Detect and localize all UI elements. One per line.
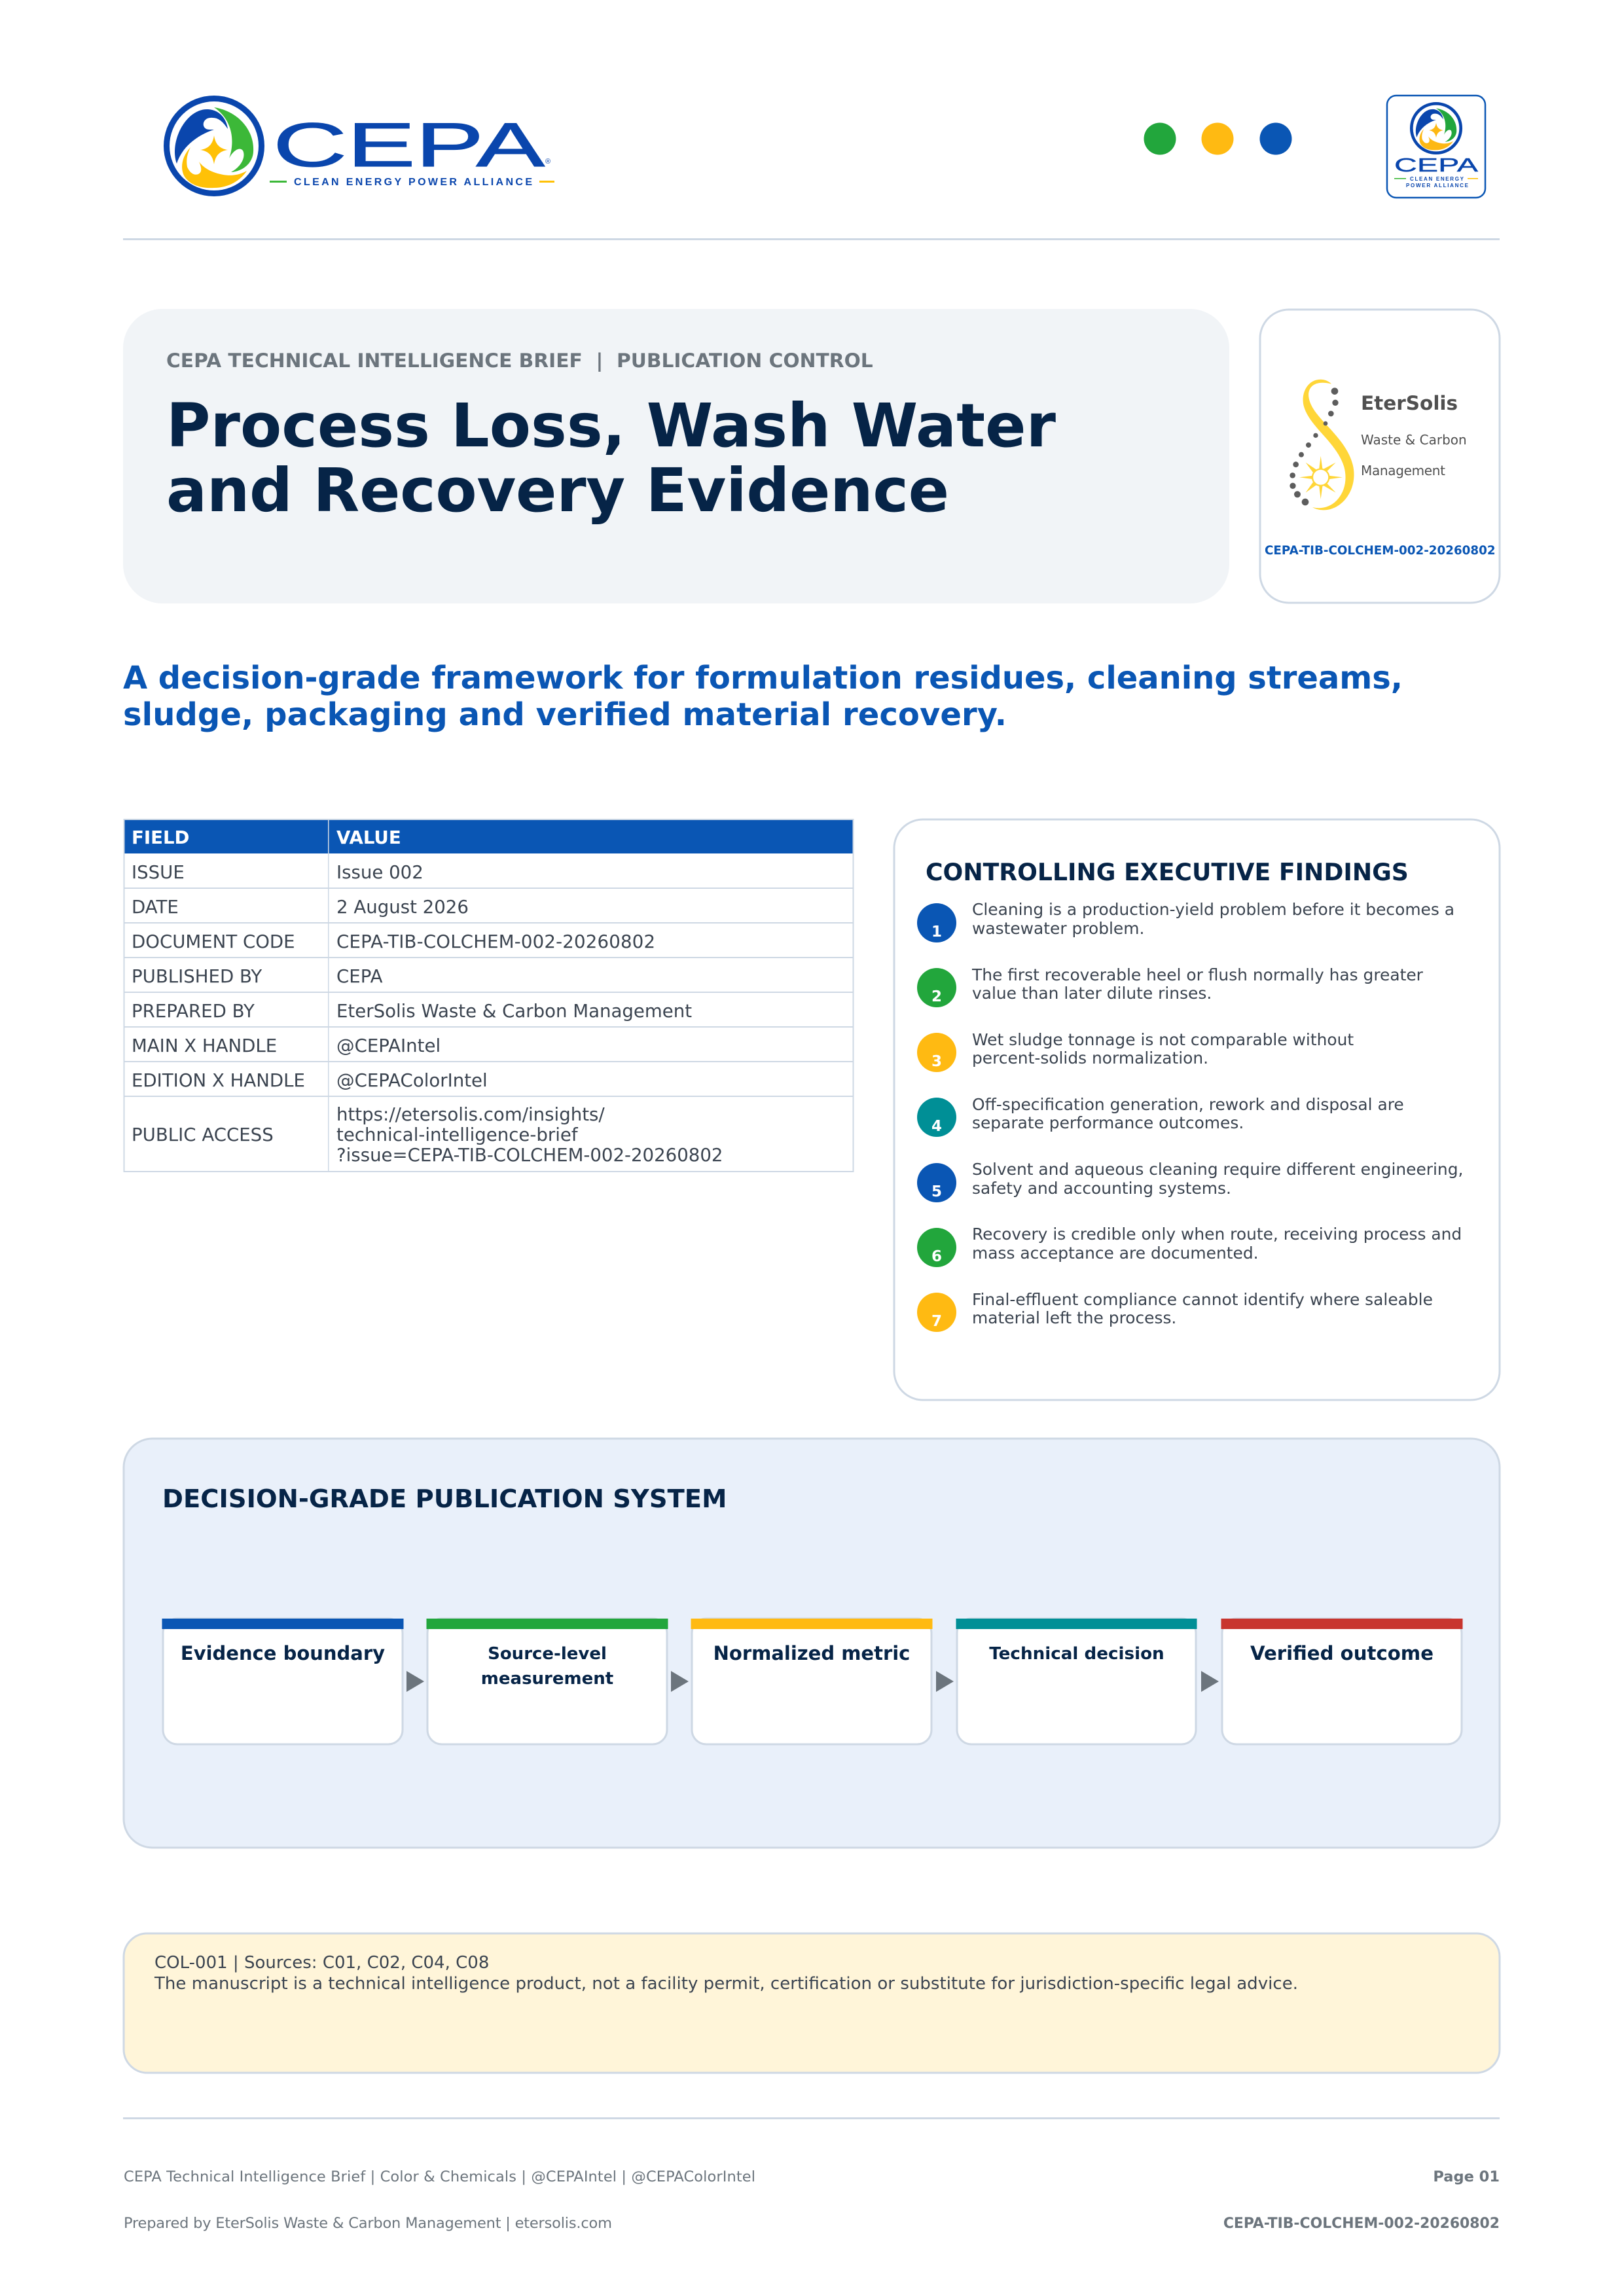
finding 3: Wet sludge tonnage is not comparable without — [972, 1030, 1354, 1049]
findings heading: CONTROLLING EXECUTIVE FINDINGS — [926, 858, 1409, 886]
table rows — [124, 819, 854, 1172]
table rows: @CEPAColorIntel — [336, 1069, 488, 1091]
table rows: CEPA — [336, 965, 383, 987]
table rows: PUBLISHED BY — [132, 965, 262, 987]
panel: hero title — [123, 309, 1229, 603]
subtitle: sludge, packaging and verified material recovery. — [123, 696, 1007, 733]
EterSolis descriptor: Waste & Carbon — [1361, 432, 1467, 448]
status dots — [1144, 123, 1292, 154]
EterSolis descriptor — [1361, 432, 1467, 478]
logo tagline: CLEAN ENERGY POWER ALLIANCE — [294, 177, 532, 188]
header rule — [123, 238, 1500, 240]
finding 5: Solvent and aqueous cleaning require different engineering, — [972, 1160, 1463, 1179]
finding 5: 5 — [931, 1183, 942, 1200]
finding 3: 3 — [931, 1053, 942, 1070]
finding 5: safety and accounting systems. — [972, 1179, 1231, 1198]
finding 4: Off-specification generation, rework and disposal are — [972, 1095, 1404, 1114]
table rows: technical-intelligence-brief — [336, 1124, 579, 1145]
document code: CEPA-TIB-COLCHEM-002-20260802 — [1265, 544, 1496, 558]
arrow 3 — [936, 1671, 954, 1692]
finding 1: 1 — [931, 924, 942, 941]
icon: CEPA badge emblem — [1411, 103, 1461, 153]
icon: EterSolis emblem — [1290, 380, 1354, 510]
table rows: ?issue=CEPA-TIB-COLCHEM-002-20260802 — [336, 1144, 723, 1166]
badge tagline: CLEAN ENERGY — [1410, 176, 1464, 182]
EterSolis name: EterSolis — [1361, 392, 1458, 414]
step: technical decision: Technical decision — [989, 1644, 1164, 1664]
table: publication control — [124, 819, 854, 1172]
step: evidence boundary: Evidence boundary — [181, 1642, 385, 1664]
step: verified outcome: Verified outcome — [1250, 1642, 1434, 1664]
finding 2: value than later dilute rinses. — [972, 984, 1212, 1003]
callout: source note: The manuscript is a technical intelligence product, not a facility permit, certification or substitute for jurisdiction-specific legal advice. — [154, 1974, 1298, 1994]
table rows: EDITION X HANDLE — [132, 1069, 305, 1091]
table rows: DOCUMENT CODE — [132, 931, 295, 952]
finding 2: The first recoverable heel or flush normally has greater — [971, 965, 1424, 984]
logo registered mark: ® — [545, 158, 550, 166]
table header: FIELD — [132, 827, 189, 848]
finding 1: Cleaning is a production-yield problem before it becomes a — [972, 900, 1454, 919]
title — [166, 391, 1056, 526]
logo wordmark: CEPA — [273, 111, 545, 180]
panel: EterSolis logo card — [1260, 310, 1500, 603]
icon: CEPA emblem — [166, 98, 262, 194]
logo: CEPA primary — [166, 98, 554, 194]
footer: Prepared by EterSolis Waste & Carbon Management | etersolis.com — [124, 2215, 612, 2232]
panel: controlling executive findings — [894, 819, 1500, 1400]
logo: CEPA badge — [1387, 96, 1485, 198]
step: source-level measurement: measurement — [481, 1669, 613, 1689]
table rows: Issue 002 — [336, 861, 424, 883]
table rows: PREPARED BY — [132, 1000, 255, 1022]
footer rule — [123, 2117, 1500, 2119]
finding 1: wastewater problem. — [972, 919, 1144, 938]
table header — [124, 819, 854, 853]
finding 7 — [917, 1290, 1433, 1332]
table rows: PUBLIC ACCESS — [132, 1124, 274, 1145]
finding 6: mass acceptance are documented. — [972, 1244, 1259, 1263]
badge tagline: POWER ALLIANCE — [1406, 183, 1469, 188]
subtitle: A decision-grade framework for formulation residues, cleaning streams, — [123, 660, 1403, 696]
table header: VALUE — [336, 827, 401, 848]
table rows: MAIN X HANDLE — [132, 1035, 277, 1056]
table rows: CEPA-TIB-COLCHEM-002-20260802 — [336, 931, 655, 952]
finding 7: 7 — [931, 1313, 942, 1330]
step: normalized metric: Normalized metric — [713, 1642, 910, 1664]
badge wordmark: CEPA — [1394, 155, 1479, 176]
table rows: @CEPAIntel — [336, 1035, 441, 1056]
callout: source note — [124, 1933, 1500, 2073]
title: Process Loss, Wash Water — [166, 391, 1056, 461]
finding 2 — [917, 965, 1424, 1007]
eyebrow: CEPA TECHNICAL INTELLIGENCE BRIEF | PUBLICATION CONTROL — [166, 350, 873, 372]
finding 1 — [917, 900, 1454, 942]
finding 3 — [917, 1030, 1354, 1072]
subtitle — [123, 660, 1403, 733]
finding 7: material left the process. — [972, 1308, 1176, 1327]
EterSolis descriptor: Management — [1361, 463, 1445, 478]
finding 3: percent-solids normalization. — [972, 1049, 1208, 1067]
callout: source note: COL-001 | Sources: C01, C02, C04, C08 — [154, 1953, 489, 1973]
arrow 1 — [406, 1671, 424, 1692]
finding 5 — [917, 1160, 1463, 1202]
step: technical decision — [956, 1619, 1197, 1744]
arrow 4 — [1201, 1671, 1219, 1692]
table rows: ISSUE — [132, 861, 185, 883]
step: source-level measurement: Source-level — [488, 1644, 607, 1664]
finding 4: 4 — [931, 1118, 942, 1135]
table rows: DATE — [132, 896, 179, 918]
system heading: DECISION-GRADE PUBLICATION SYSTEM — [162, 1484, 727, 1514]
arrow 2 — [671, 1671, 689, 1692]
finding 6: 6 — [931, 1248, 942, 1265]
finding 4 — [917, 1095, 1404, 1137]
table rows: https://etersolis.com/insights/ — [336, 1103, 605, 1125]
table rows: 2 August 2026 — [336, 896, 469, 918]
finding 2: 2 — [931, 988, 942, 1005]
footer — [124, 2168, 1500, 2232]
finding 6 — [917, 1225, 1462, 1267]
step: normalized metric — [691, 1619, 932, 1744]
footer: CEPA Technical Intelligence Brief | Color & Chemicals | @CEPAIntel | @CEPAColorIntel — [124, 2168, 755, 2185]
finding 6: Recovery is credible only when route, receiving process and — [972, 1225, 1462, 1244]
step: evidence boundary — [162, 1619, 403, 1744]
step: verified outcome — [1221, 1619, 1462, 1744]
finding 7: Final-effluent compliance cannot identify where saleable — [972, 1290, 1433, 1309]
step: source-level measurement — [427, 1619, 668, 1744]
table rows: EterSolis Waste & Carbon Management — [336, 1000, 692, 1022]
badge tagline — [1394, 176, 1478, 188]
title: and Recovery Evidence — [166, 456, 949, 526]
footer: Page 01 — [1433, 2168, 1500, 2185]
footer: CEPA-TIB-COLCHEM-002-20260802 — [1223, 2215, 1500, 2232]
finding 4: separate performance outcomes. — [972, 1113, 1244, 1132]
panel: decision-grade publication system — [124, 1439, 1500, 1848]
